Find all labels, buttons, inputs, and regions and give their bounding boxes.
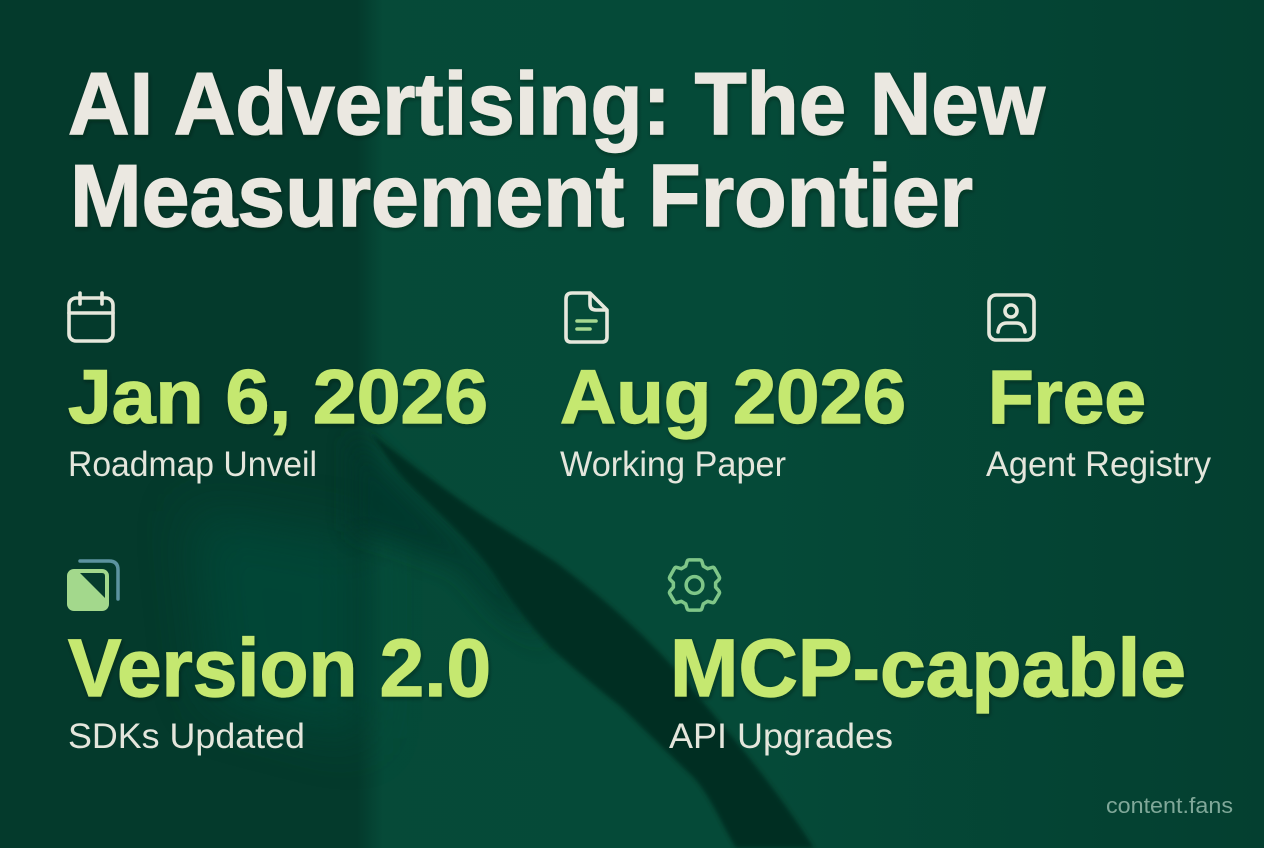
icon: document [566,293,607,342]
icon: calendar [69,293,113,341]
title: Measurement Frontier [70,146,973,245]
stat: MCP-capable: API Upgrades [669,717,893,756]
stat: Version 2.0: Version 2.0 [68,623,491,714]
stat: Jan 6, 2026: Roadmap Unveil [68,445,317,484]
stat: Free: Agent Registry [986,445,1211,484]
title: AI Advertising: The New [68,54,1046,153]
stat: Aug 2026: Working Paper [560,445,786,484]
stat: Version 2.0 [67,561,491,756]
stat: Aug 2026: Aug 2026 [560,355,906,440]
stat: MCP-capable: MCP-capable [670,623,1186,714]
stat: Aug 2026 [560,293,906,484]
stat: Free [986,295,1211,484]
stat: Free: Free [988,355,1146,440]
stat: MCP-capable [669,560,1186,756]
watermark: content.fans [1106,793,1233,818]
stat: Jan 6, 2026 [68,293,488,484]
icon: layered squares [67,561,118,611]
stat: Jan 6, 2026: Jan 6, 2026 [68,355,488,440]
icon: person badge [989,295,1034,340]
title [68,54,1046,245]
stat: Version 2.0: SDKs Updated [68,717,305,756]
icon: gear [670,560,719,610]
